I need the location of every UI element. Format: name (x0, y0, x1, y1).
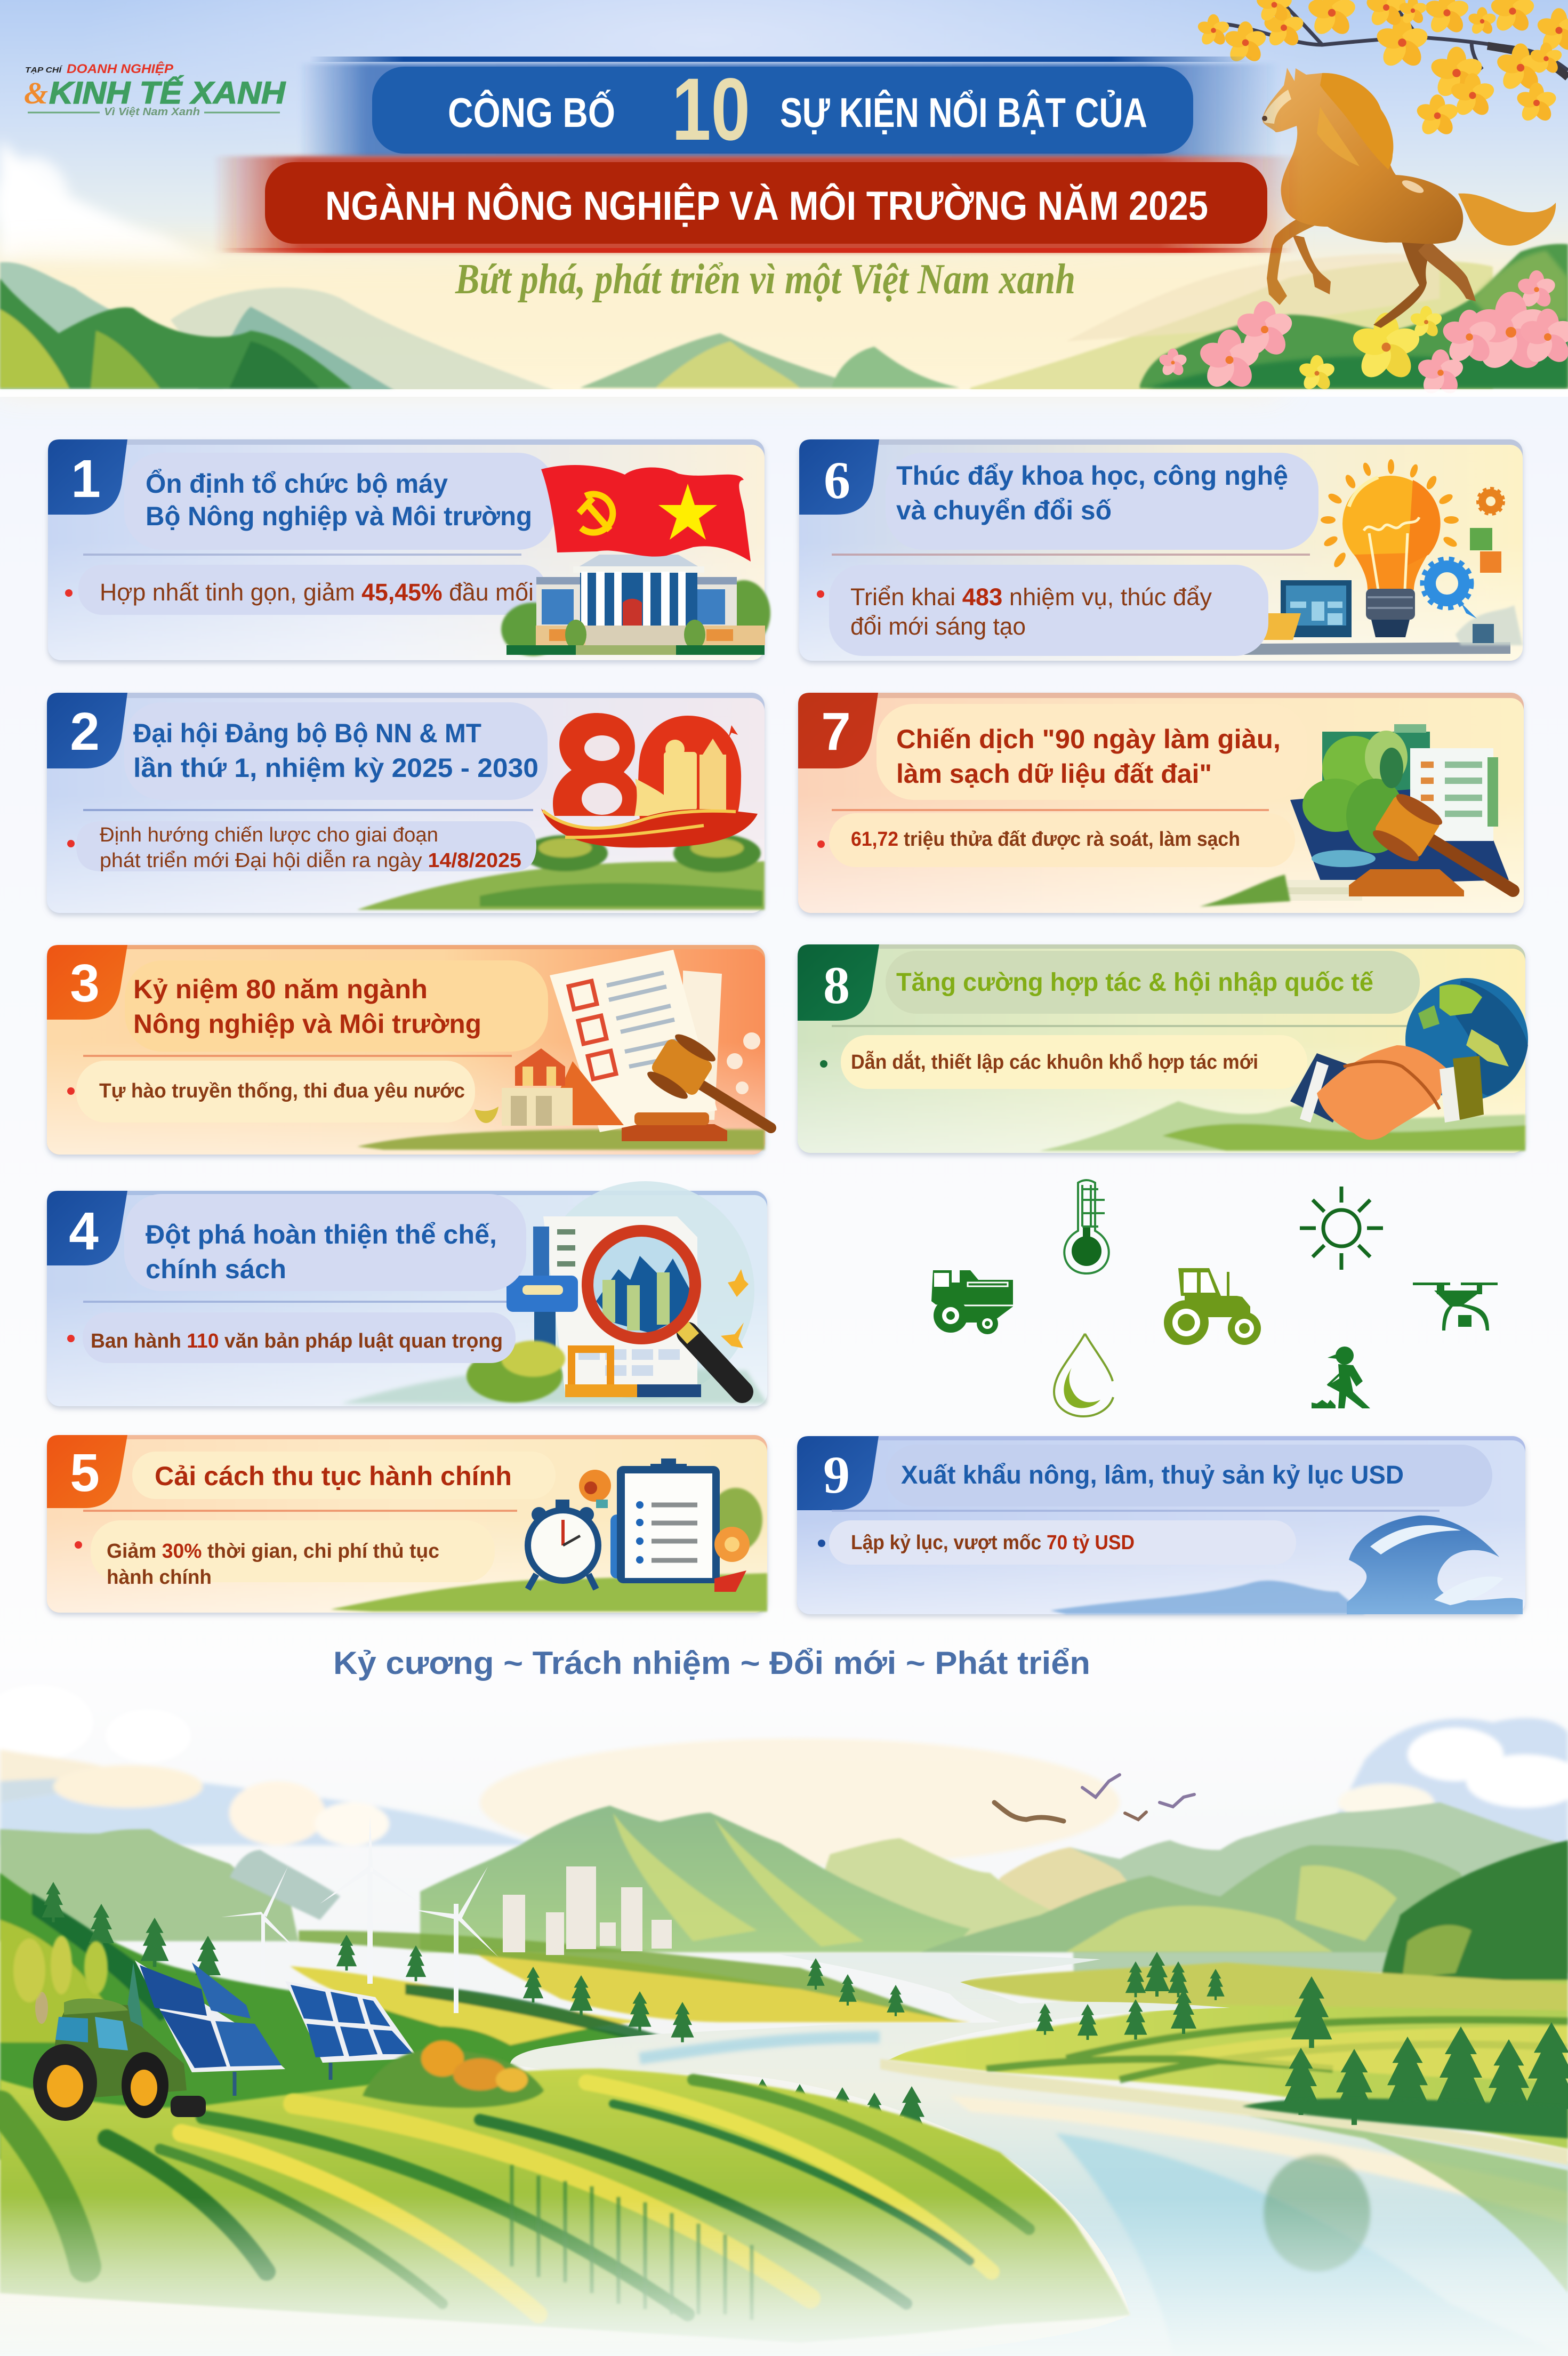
logo: DOANH NGHIỆP (67, 61, 174, 76)
icon: far fields and river (299, 1840, 1568, 2149)
title pill 8: Tăng cường hợp tác & hội nhập quốc tế (896, 968, 1373, 997)
title pill 1: Ổn định tổ chức bộ máy (146, 468, 448, 499)
panel: event 8 (798, 944, 1528, 1153)
title banner: red (213, 156, 1301, 253)
badge 7 (798, 693, 878, 768)
logo: KINH TẾ XANH (49, 76, 286, 110)
title banner: red: NGÀNH NÔNG NGHIỆP VÀ MÔI TRƯỜNG NĂM 2025 (325, 183, 1208, 229)
detail pill 6 (817, 565, 1268, 656)
badge 6: 6 (824, 451, 850, 510)
title pill 6: và chuyển đổi số (896, 495, 1112, 525)
badge 1: 1 (71, 449, 101, 509)
icon: report and magnifier (341, 1181, 767, 1404)
title pill 2 (124, 702, 548, 800)
icon: river (510, 1953, 1568, 2356)
badge 2 (47, 693, 127, 768)
title pill 2: Đại hội Đảng bộ Bộ NN & MT (133, 718, 481, 748)
icon: left hill (0, 1873, 682, 2160)
title pill 3 (125, 960, 548, 1052)
tagline: Bứt phá, phát triển vì một Việt Nam xanh (455, 256, 1075, 303)
panel: event 2 (47, 693, 765, 913)
panel: icon cluster (931, 1180, 1498, 1416)
badge 6 (799, 439, 879, 515)
title pill 4: chính sách (146, 1254, 286, 1284)
icon: land records and gavel (1200, 724, 1513, 907)
logo: & (24, 76, 48, 110)
panel: event 5 (47, 1435, 767, 1613)
title pill 4: Đột phá hoàn thiện thể chế, (146, 1220, 497, 1249)
detail pill 8 (820, 1035, 1307, 1089)
landscape illustration (0, 1653, 1568, 2356)
icon: grass strip (357, 1129, 765, 1150)
detail pill 3 (67, 1061, 475, 1123)
icon: mountains (0, 1802, 1568, 1973)
title pill 4 (124, 1194, 526, 1291)
badge 2: 2 (70, 702, 100, 762)
title pill 5: Cải cách thu tục hành chính (155, 1461, 512, 1491)
badge 7: 7 (821, 702, 851, 762)
badge 9 (797, 1436, 879, 1510)
icon: flowering foliage (1140, 244, 1568, 397)
detail pill 4 (67, 1312, 516, 1363)
bottom fade (0, 2197, 1568, 2356)
title pill 6 (886, 453, 1318, 550)
header bottom strip (0, 389, 1568, 397)
icon: party and national flag (541, 465, 751, 562)
title pill 6: Thúc đẩy khoa học, công nghệ (896, 461, 1288, 491)
icon: tractor (1164, 1268, 1261, 1345)
icon: grass strip (331, 1573, 767, 1612)
panel: event 9 (797, 1436, 1525, 1614)
detail pill 1 (65, 565, 546, 615)
title pill 7: làm sạch dữ liệu đất đai" (896, 759, 1212, 789)
detail pill 6: Triển khai 483 nhiệm vụ, thúc đẩy (850, 583, 1212, 611)
detail pill 7 (817, 813, 1295, 867)
panel: event 4 (47, 1181, 767, 1406)
title number 10: 10 (672, 60, 750, 159)
detail pill 7: 61,72 triệu thửa đất được rà soát, làm sạch (851, 828, 1240, 851)
detail pill 2: Định hướng chiến lược cho giai đoạn (100, 824, 438, 846)
icon: documents and gavel (475, 950, 771, 1141)
icon: tree rows (42, 1882, 1568, 2140)
icon: light bulb and monitor (1237, 459, 1523, 655)
title pill 3: Nông nghiệp và Môi trường (133, 1009, 481, 1039)
detail pill 9 (818, 1520, 1296, 1565)
logo (24, 61, 286, 118)
detail pill 8: Dẫn dắt, thiết lập các khuôn khổ hợp tác mới (851, 1050, 1258, 1073)
icon: birds (994, 1775, 1194, 1821)
icon: globe and handshake (1290, 978, 1528, 1140)
panel: event 3 (47, 945, 771, 1155)
detail pill 2: phát triển mới Đại hội diễn ra ngày 14/8/2025 (100, 849, 521, 872)
title pill 2: lần thứ 1, nhiệm kỳ 2025 - 2030 (133, 753, 538, 783)
header illustration background (0, 0, 1568, 397)
title banner: blue (299, 57, 1280, 159)
title pill 8 (886, 951, 1420, 1014)
icon: combine harvester (931, 1270, 1013, 1334)
title pill 9: Xuất khẩu nông, lâm, thuỷ sản kỷ lục USD (901, 1461, 1404, 1489)
icon: ministry building (501, 555, 770, 656)
title text: công bố: CÔNG BỐ (448, 89, 615, 136)
badge 4 (47, 1191, 127, 1265)
icon: ocean wave (1050, 1516, 1523, 1614)
title pill 5 (132, 1452, 556, 1499)
panel: event 7 (798, 693, 1524, 913)
icon: meadow (357, 834, 765, 910)
detail pill 2 (67, 821, 536, 872)
slogan: Kỷ cương ~ Trách nhiệm ~ Đổi mới ~ Phát triển (333, 1645, 1090, 1681)
page background (0, 0, 1568, 1706)
icon: emblem 80 years (541, 713, 758, 848)
detail pill 9: Lập kỷ lục, vượt mốc 70 tỷ USD (851, 1532, 1135, 1554)
panel: event 6 (799, 439, 1523, 661)
badge 5 (47, 1435, 127, 1508)
icon: city towers (503, 1866, 672, 1955)
detail pill 1: Hợp nhất tinh gọn, giảm 45,45% đầu mối (100, 579, 534, 606)
icon: clouds (0, 1685, 1568, 1866)
badge 9: 9 (823, 1445, 850, 1504)
detail pill 6: đổi mới sáng tạo (850, 613, 1026, 640)
icon: left forest hill (0, 278, 352, 388)
icon: drop (1054, 1334, 1113, 1416)
badge 3 (47, 945, 127, 1020)
icon: river details (640, 2037, 1568, 2356)
icon: clipboard and clock (525, 1459, 762, 1592)
badge 3: 3 (70, 953, 100, 1013)
icon: drone (1413, 1283, 1498, 1331)
icon: golden horse (1262, 68, 1556, 328)
title pill 9 (886, 1445, 1492, 1506)
icon: tractor green (33, 1992, 206, 2121)
icon: wind turbines (221, 1816, 498, 2013)
detail pill 5 (75, 1520, 495, 1589)
icon: left clouds (0, 140, 229, 267)
title pill 7: Chiến dịch "90 ngày làm giàu, (896, 724, 1281, 754)
icon: foreground hill (0, 2069, 1130, 2343)
detail pill 3: Tự hào truyền thống, thi đua yêu nước (99, 1080, 465, 1102)
icon: right bank (880, 2059, 1568, 2293)
icon: green hills (1040, 1101, 1525, 1151)
badge 8: 8 (823, 956, 850, 1015)
title text: sự kiện: SỰ KIỆN NỔI BẬT CỦA (780, 89, 1147, 136)
icon: orange shrubs (363, 2040, 544, 2107)
title pill 3: Kỷ niệm 80 năm ngành (133, 974, 428, 1004)
title pill 1: Bộ Nông nghiệp và Môi trường (146, 501, 532, 531)
badge 4: 4 (69, 1201, 99, 1261)
badge 1 (48, 439, 127, 515)
title pill 7 (877, 704, 1307, 800)
icon: blossom branch (1196, 0, 1568, 138)
icon: solar panels (117, 1960, 419, 2101)
icon: sun (1300, 1187, 1383, 1270)
title pill 1 (124, 453, 556, 550)
icon: left trees (13, 1936, 108, 2002)
icon: farm worker (1312, 1347, 1370, 1408)
panel: event 1 (48, 439, 770, 660)
icon: distant mountains (0, 254, 1493, 390)
detail pill 4: Ban hành 110 văn bản pháp luật quan trọng (91, 1330, 503, 1352)
icon: thermometer (1064, 1180, 1109, 1273)
logo: TẠP CHÍ (25, 66, 63, 75)
badge 8 (798, 944, 879, 1021)
detail pill 5: hành chính (107, 1566, 212, 1589)
badge 5: 5 (70, 1443, 100, 1503)
detail pill 5: Giảm 30% thời gian, chi phí thủ tục (107, 1540, 439, 1562)
logo: Vì Việt Nam Xanh (104, 106, 200, 118)
